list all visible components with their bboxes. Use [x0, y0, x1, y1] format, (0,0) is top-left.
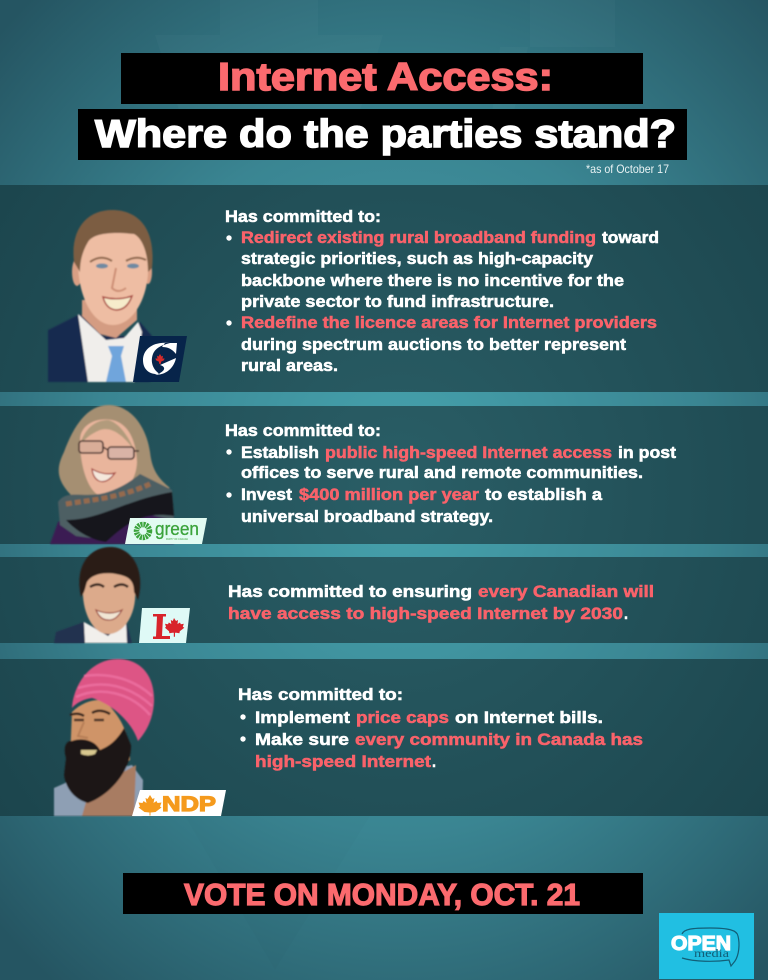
text: NDP commitments: Has committed to:	[238, 685, 403, 704]
text: Green commitments: universal broadband strategy.	[241, 507, 493, 526]
text: Green commitments: Establish	[241, 443, 319, 462]
logo: OpenMedia: media	[694, 946, 730, 960]
text: NDP commitments: Make sure	[255, 730, 349, 749]
text: Liberal commitment: Has committed to ensuring	[228, 582, 472, 601]
text: Conservative commitments	[225, 207, 659, 375]
title	[121, 53, 643, 104]
date note: *as of October 17	[586, 162, 669, 176]
title: Internet Access:	[218, 56, 553, 99]
text: Conservative commitments: during spectrum auctions to better represent	[241, 335, 626, 354]
text: Liberal commitment: .	[624, 604, 628, 623]
text: Green commitments: in post	[618, 443, 676, 462]
portrait: Green leader	[50, 405, 174, 544]
panel: Conservative	[0, 185, 768, 392]
text: NDP commitments: on Internet bills.	[455, 708, 603, 727]
text: Green commitments: public high-speed Internet access	[325, 443, 612, 462]
text: Green commitments: Invest	[241, 485, 292, 504]
panel: Liberal	[0, 547, 768, 643]
portrait: NDP leader	[54, 659, 154, 816]
subtitle: Where do the parties stand?	[95, 113, 676, 156]
call to action	[123, 873, 643, 914]
text: NDP commitments	[238, 685, 643, 771]
text: Green commitments: offices to serve rural and remote communities.	[241, 463, 643, 482]
logo: OpenMedia: OPEN	[671, 933, 731, 955]
text: Liberal commitment	[228, 582, 654, 623]
text: NDP commitments: Implement	[255, 708, 350, 727]
text: Conservative commitments: toward	[602, 228, 659, 247]
text: Conservative commitments: backbone where there is no incentive for the	[241, 271, 624, 290]
text: Green commitments: $400 million per year	[299, 485, 479, 504]
portrait: Liberal leader	[54, 547, 140, 643]
badge: Conservative logo	[133, 336, 187, 382]
text: Green commitments: Has committed to:	[225, 421, 381, 440]
badge: Liberal logo	[139, 608, 190, 643]
text: NDP commitments: high-speed Internet	[255, 752, 431, 771]
text: NDP commitments: .	[432, 752, 436, 771]
text: Conservative commitments: Has committed to:	[225, 207, 381, 226]
panel: NDP	[0, 659, 768, 816]
text: Conservative commitments: strategic priorities, such as high-capacity	[241, 249, 594, 268]
panel: Green	[0, 405, 768, 544]
text: NDP commitments: every community in Canada has	[355, 730, 643, 749]
text: Conservative commitments: Redirect existing rural broadband funding	[241, 228, 596, 247]
call to action: VOTE ON MONDAY, OCT. 21	[184, 878, 580, 912]
portrait: Conservative leader	[48, 210, 153, 382]
badge: Green logo	[125, 518, 207, 544]
text: Green commitments: to establish a	[485, 485, 603, 504]
text: Conservative commitments: private sector to fund infrastructure.	[241, 292, 554, 311]
text: Liberal commitment: every Canadian will	[478, 582, 654, 601]
badge: NDP logo: NDP	[162, 793, 216, 816]
badge: Green logo: PARTY OF CANADA	[166, 537, 188, 541]
text: Conservative commitments: Redefine the licence areas for Internet providers	[241, 313, 657, 332]
text: Liberal commitment: have access to high-speed Internet by 2030	[228, 604, 623, 623]
text: NDP commitments: price caps	[356, 708, 449, 727]
badge: NDP logo	[132, 790, 226, 816]
text: Conservative commitments: rural areas.	[241, 356, 338, 375]
logo: OpenMedia	[659, 913, 754, 979]
text: Green commitments	[225, 421, 676, 526]
badge: Green logo: green	[155, 519, 199, 539]
